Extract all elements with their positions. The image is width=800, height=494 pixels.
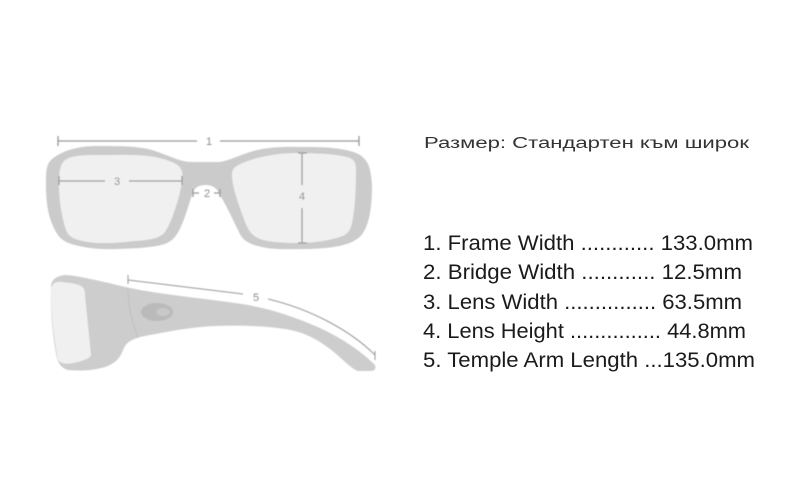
- dimension 3: lens width: 3: [114, 176, 120, 188]
- dimension 5: temple arm length: 5: [253, 292, 259, 304]
- lens width row: 3. Lens Width ............... 63.5mm: [423, 290, 742, 314]
- side frame and temple arm: [51, 275, 375, 371]
- left lens: [59, 155, 182, 243]
- brand logo: [141, 303, 173, 321]
- dimension 4: lens height: 4: [299, 191, 305, 203]
- frame width row: 1. Frame Width ............ 133.0mm: [423, 231, 753, 255]
- temple hinge seam: [128, 288, 138, 338]
- size heading: Размер: Стандартен към широк: [424, 135, 749, 152]
- temple arm length row: 5. Temple Arm Length ...135.0mm: [423, 348, 755, 372]
- side lens: [51, 282, 91, 364]
- dimension 4: lens height: [298, 153, 307, 243]
- front view of sunglasses: [46, 136, 372, 249]
- side view of sunglasses: [51, 275, 375, 371]
- dimension 2: bridge width: 2: [204, 188, 210, 200]
- front frame: [46, 146, 372, 249]
- measurements list: [423, 231, 755, 372]
- dimension 5: temple arm length: [128, 275, 375, 360]
- lens height row: 4. Lens Height ............... 44.8mm: [423, 319, 746, 343]
- bridge width row: 2. Bridge Width ............ 12.5mm: [423, 260, 742, 284]
- dimension 2: bridge width: [193, 188, 220, 200]
- right lens: [232, 153, 356, 243]
- dimension 1: frame width: 1: [206, 136, 212, 148]
- dimension 1: frame width: [58, 136, 359, 148]
- dimension 3: lens width: [59, 176, 182, 188]
